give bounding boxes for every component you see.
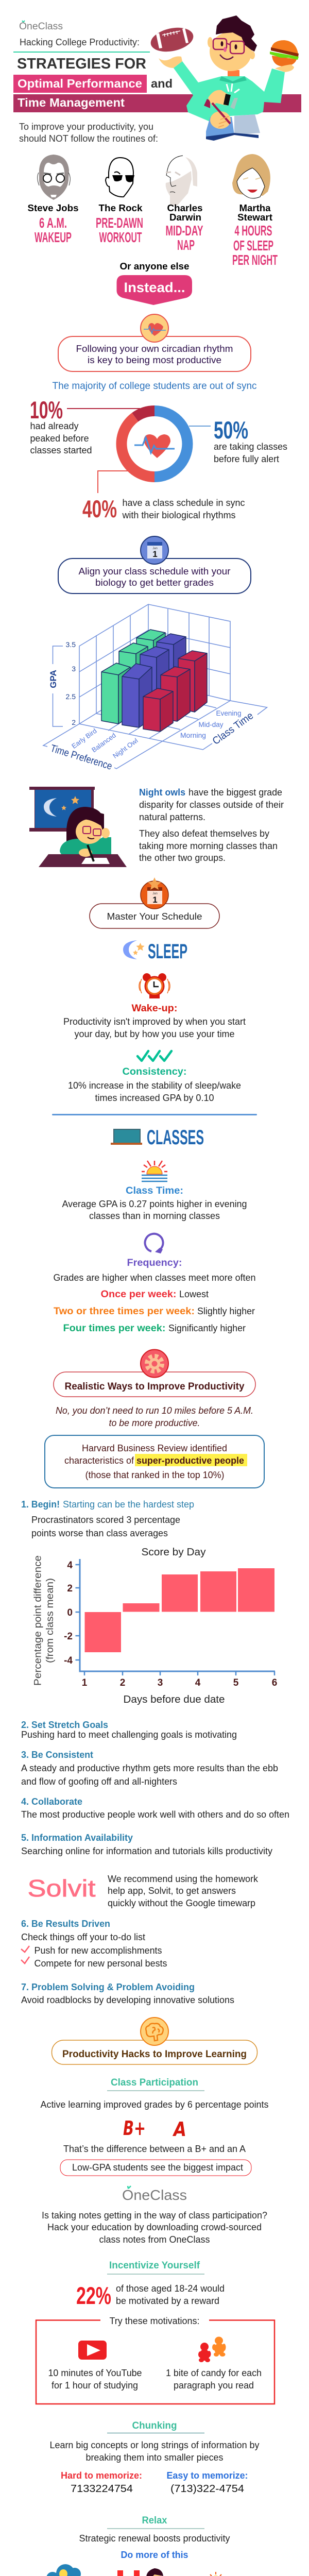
list item 1: begin: 1. Begin!: [21, 1499, 60, 1510]
list item 4: [21, 1797, 289, 1820]
text: frequency: Grades are higher when classes meet more often: [54, 1273, 255, 1283]
routine: Martha: PER NIGHT: [232, 252, 278, 268]
example: easy to memorize: Easy to memorize:: [167, 2470, 248, 2481]
text: night owls: [139, 787, 284, 863]
y axis label: (from class mean): [45, 1578, 56, 1663]
handwritten grades: B+: [123, 2117, 146, 2140]
stat: 10 percent: [30, 396, 92, 455]
icon: three check marks: [138, 1051, 171, 1061]
text: youtube reward: 10 minutes of YouTube: [48, 2368, 142, 2378]
list item 1: begin: Procrastinators scored 3 percentage: [31, 1515, 180, 1525]
title banner: time management: [13, 94, 301, 112]
handwritten grades: [123, 2117, 186, 2141]
list item 6: Compete for new personal bests: [34, 1958, 167, 1969]
segment: 50 percent: [154, 405, 193, 482]
panel: people routines: [28, 154, 278, 268]
logo: Solvit: Solvit: [28, 1875, 96, 1902]
icon: calendar with star: [141, 877, 168, 909]
title banner: time management: Time Management: [18, 96, 125, 109]
stat: 22 percent: of those aged 18-24 would: [116, 2283, 225, 2294]
y axis label: [33, 1555, 56, 1686]
name: Charles Darwin: Darwin: [169, 212, 201, 223]
icon: heart pulse: [141, 314, 168, 342]
example: hard to memorize: Hard to memorize:: [61, 2470, 142, 2481]
text: candy reward: 1 bite of candy for each: [166, 2368, 262, 2378]
stat: 10 percent: had already: [30, 421, 78, 431]
axis: time preference: Balanced: [90, 731, 117, 754]
text: class time: Average GPA is 0.27 points higher in evening: [62, 1199, 247, 1209]
list item 3: 3. Be Consistent: [21, 1750, 93, 1760]
icon: gear: [141, 1350, 168, 1378]
routine: Jobs: WAKEUP: [35, 229, 72, 245]
icon: chalkboard: [111, 1129, 142, 1145]
text: night owls: taking more morning classes than: [139, 841, 278, 851]
routine: Jobs: [35, 215, 72, 245]
list item 5: [21, 1833, 272, 1856]
list item 3: A steady and productive rhythm gets more results than the ebb: [21, 1763, 278, 1773]
leader lines: [67, 409, 211, 493]
portrait: Martha Stewart: [232, 154, 270, 198]
list item 2: [21, 1720, 237, 1740]
icon: football: [148, 24, 196, 55]
list item 2: 2. Set Stretch Goals: [21, 1720, 108, 1730]
text: candy reward: paragraph you read: [174, 2380, 254, 2391]
callout: instead: [116, 275, 192, 305]
text: frequency: Significantly higher: [168, 1323, 246, 1333]
x axis label: Days before due date: [124, 1694, 225, 1705]
stat: 50 percent: 50%: [214, 416, 248, 444]
axis: class time: Morning: [180, 731, 206, 739]
section: incentivize yourself: Incentivize Yourself: [109, 2260, 200, 2271]
stat: 10 percent: peaked before: [30, 433, 89, 444]
portrait: Charles Darwin: [166, 156, 197, 206]
title line 1: STRATEGIES FOR: [17, 56, 146, 72]
y axis label: Percentage point difference: [33, 1555, 43, 1686]
text: Master Your Schedule: [107, 911, 202, 922]
name: Martha Stewart: Martha: [239, 203, 271, 213]
x tick labels: [82, 1677, 277, 1688]
bars: front row: [101, 663, 173, 732]
text: Solvit recommendation: help app, Solvit, to get answers: [108, 1886, 236, 1896]
example: easy to memorize: [167, 2470, 248, 2495]
x tick labels: 6: [272, 1677, 277, 1688]
name: Charles Darwin: Charles: [167, 203, 203, 213]
text: candy reward: [166, 2368, 262, 2391]
logo: OneClass: OneClass: [122, 2187, 187, 2203]
y tick labels: -2: [64, 1631, 73, 1642]
callout: instead: Instead...: [124, 280, 185, 295]
text: consistency: times increased GPA by 0.10: [95, 1093, 214, 1103]
list item 6: Push for new accomplishments: [34, 1945, 162, 1956]
axis: time preference: Night Owl: [111, 737, 140, 760]
x tick labels: 1: [82, 1677, 88, 1688]
routine: Darwin: MID-DAY: [166, 223, 203, 239]
y tick labels: 4: [67, 1560, 73, 1571]
section: class participation: [40, 2077, 269, 2110]
panel: master your schedule heading: [90, 877, 219, 928]
accent rule: [13, 52, 150, 53]
text: class time: [62, 1185, 247, 1221]
bars: middle row: [119, 643, 190, 721]
panel: realistic ways heading: [54, 1350, 255, 1397]
subtitle: Hacking College Productivity:: [20, 37, 140, 47]
list item 6: [21, 1919, 167, 1969]
icon: calendar with star: Jan: [152, 892, 158, 895]
section: class participation: Class Participation: [111, 2077, 198, 2088]
list item 5: Searching online for information and tutorials kills productivity: [21, 1846, 272, 1856]
example: easy to memorize: (713)322-4754: [170, 2483, 244, 2495]
routine: Martha: 4 HOURS: [235, 223, 272, 239]
text: frequency: Once per week:: [101, 1289, 176, 1300]
list item 3: [21, 1750, 278, 1787]
section heading: sleep: SLEEP: [148, 940, 187, 963]
icon: alarm clock: [139, 973, 170, 998]
highlight: super-productive people: [136, 1455, 244, 1466]
segment: 40 percent: [116, 413, 154, 482]
portrait: The Rock: [106, 158, 134, 197]
3D bar chart: GPA by class time and time preference: [43, 604, 267, 772]
name: The Rock: The Rock: [99, 203, 143, 213]
list item 7: 7. Problem Solving & Problem Avoiding: [21, 1982, 195, 1992]
logo: OneClass: OneClass: [19, 21, 63, 32]
text: notes promo: Is taking notes getting in the way of class participation?: [42, 2210, 267, 2221]
text: frequency: Lowest: [179, 1289, 209, 1299]
list item 6: 6. Be Results Driven: [21, 1919, 110, 1929]
routine: Martha: OF SLEEP: [233, 238, 273, 253]
section heading: classes: [111, 1126, 204, 1149]
text: or anyone else: Or anyone else: [119, 261, 190, 272]
panel: harvard business review: [45, 1435, 264, 1488]
illustration: daydreaming: [46, 2564, 101, 2576]
heading: out of sync: The majority of college students are out of sync: [53, 381, 256, 392]
illustration: night owl at desk: [29, 787, 127, 867]
text: night owls: disparity for classes outside of their: [139, 800, 284, 810]
stat: 22 percent: 22%: [76, 2282, 111, 2309]
text: consistency: 10% increase in the stability of sleep/wake: [68, 1080, 241, 1091]
text: difference: That’s the difference between a B+ and an A: [63, 2144, 246, 2154]
text: consistency: Consistency:: [123, 1066, 186, 1077]
illustration: sunbathing: [194, 2572, 259, 2576]
icon: calendar with star: 1: [152, 895, 158, 905]
section: chunking: Chunking: [132, 2420, 177, 2431]
panel: try these motivations: Try these motivations:: [109, 2316, 200, 2326]
axis: GPA: GPA: [48, 670, 58, 688]
section: relax: Do more of this: [121, 2550, 188, 2560]
icon: calendar: [141, 536, 168, 564]
text: night owls: Night owls: [139, 787, 185, 798]
axis: GPA: 2.5: [66, 692, 76, 701]
text: frequency: Slightly higher: [197, 1306, 255, 1316]
list item 1: begin: points worse than class averages: [31, 1528, 168, 1538]
section: relax: Relax: [142, 2515, 167, 2526]
routine: Martha: [232, 223, 278, 268]
intro text: should NOT follow the routines of:: [19, 133, 158, 144]
section: chunking: [49, 2420, 260, 2495]
text: notes promo: Hack your education by downloading crowd-sourced: [47, 2222, 262, 2232]
panel: try these motivations: [36, 2316, 274, 2404]
grid: [43, 604, 267, 769]
text: biology to get better grades: [95, 578, 214, 588]
portrait: Steve Jobs: [38, 155, 70, 200]
text: notes promo: class notes from OneClass: [99, 2234, 210, 2245]
axis: class time: [180, 709, 255, 747]
text: youtube reward: [48, 2368, 142, 2391]
section heading: sleep: [123, 940, 187, 963]
section: chunking: Learn big concepts or long strings of information by: [49, 2440, 260, 2450]
list item 1: begin: Starting can be the hardest step: [63, 1499, 194, 1510]
panel: harvard business review: (those that ranked in the top 10%): [85, 1470, 225, 1480]
icon: moon and stars: [123, 940, 145, 959]
icon: burger: [270, 40, 299, 66]
text: frequency: [54, 1258, 255, 1334]
text: Solvit recommendation: quickly without the Google timewarp: [108, 1898, 255, 1908]
icon: notebook: [206, 114, 260, 141]
stat: 10 percent: 10%: [30, 396, 63, 423]
x tick labels: 4: [195, 1677, 201, 1688]
handwritten grades: A: [172, 2118, 186, 2141]
list item 5: 5. Information Availability: [21, 1833, 133, 1843]
text: [78, 566, 231, 588]
y tick labels: -4: [64, 1655, 73, 1666]
text: italic note: No, you don’t need to run 10 miles before 5 A.M.: [56, 1405, 253, 1416]
text: [76, 344, 233, 365]
section: relax: [79, 2515, 230, 2560]
stat: 22 percent: [76, 2282, 225, 2309]
text: is key to being most productive: [88, 355, 221, 365]
text: Align your class schedule with your: [78, 566, 231, 577]
text: Following your own circadian rhythm: [76, 344, 233, 354]
axis: GPA: [48, 640, 76, 726]
text: italic note: [56, 1405, 253, 1428]
illustration: exercising: [115, 2568, 177, 2576]
name: Charles Darwin: [167, 203, 203, 223]
icon: sunrise: [142, 1161, 167, 1181]
routine: Darwin: NAP: [177, 237, 195, 253]
routine: Rock: WORKOUT: [99, 229, 142, 245]
list item 3: and flow of goofing off and all-nighters: [21, 1776, 177, 1787]
name: Martha Stewart: Stewart: [237, 212, 272, 223]
text: night owls: They also defeat themselves by: [139, 828, 269, 839]
stat: 22 percent: be motivated by a reward: [116, 2296, 219, 2306]
text: night owls: natural patterns.: [139, 812, 205, 822]
stat: 50 percent: [214, 416, 287, 464]
list item 4: The most productive people work well with others and do so often: [21, 1809, 289, 1820]
donut chart: class schedule sync: [67, 405, 211, 493]
chart title: Score by Day: [141, 1547, 206, 1558]
text: notes promo: [42, 2210, 267, 2245]
icon: cycle arrow: [145, 1234, 163, 1253]
text: frequency: Four times per week:: [63, 1323, 166, 1334]
bars: back row: [136, 630, 207, 712]
stat: 50 percent: are taking classes: [214, 442, 287, 452]
intro text: [19, 122, 158, 144]
stat: 40 percent: with their biological rhythms: [122, 510, 236, 520]
text: Realistic Ways to Improve Productivity: [65, 1381, 245, 1392]
illustration: multitasking student: [148, 15, 299, 141]
bar chart: score by day: [33, 1547, 277, 1705]
axis: time preference: [49, 727, 140, 772]
name: Steve Jobs: Steve Jobs: [28, 203, 78, 213]
section: relax: Strategic renewal boosts productivity: [79, 2533, 230, 2544]
text: frequency: Frequency:: [127, 1258, 182, 1268]
text: wake-up: Wake-up:: [132, 1003, 177, 1014]
panel: harvard business review: characteristics of: [64, 1455, 134, 1466]
list item 1: begin: [21, 1499, 194, 1538]
text: wake-up: your day, but by how you use your time: [74, 1029, 235, 1039]
section: class participation: Active learning improved grades by 6 percentage points: [40, 2099, 269, 2110]
text: class time: Class Time:: [126, 1185, 183, 1196]
text: class time: classes than in morning classes: [89, 1211, 220, 1221]
axis: time preference: Early Bird: [70, 727, 98, 750]
panel: circadian rhythm heading: [58, 314, 251, 371]
icon: calendar: 1: [152, 549, 158, 559]
list item 7: Avoid roadblocks by developing innovative solutions: [21, 1995, 234, 2005]
text: frequency: Two or three times per week:: [54, 1306, 195, 1317]
list item 4: 4. Collaborate: [21, 1797, 82, 1807]
text: italic note: to be more productive.: [109, 1418, 200, 1428]
routine: Rock: [96, 215, 143, 245]
example: hard to memorize: 7133224754: [71, 2483, 133, 2495]
segment: 10 percent: [132, 405, 154, 421]
stat: 10 percent: classes started: [30, 445, 92, 455]
routine: Rock: PRE-DAWN: [96, 215, 143, 231]
text: wake-up: [63, 1003, 246, 1039]
x tick labels: 5: [233, 1677, 239, 1688]
title banner: optimal performance: [13, 75, 147, 93]
panel: productivity hacks heading: [52, 2018, 258, 2064]
text: Solvit recommendation: We recommend using the homework: [108, 1874, 259, 1884]
icon: check marks: [21, 1946, 29, 1963]
text: Productivity Hacks to Improve Learning: [62, 2049, 247, 2060]
axis: GPA: 3: [72, 665, 76, 673]
intro text: To improve your productivity, you: [19, 122, 153, 132]
panel: align schedule heading: [58, 536, 251, 594]
icon: calendar: Jan: [152, 547, 158, 550]
text: night owls: have the biggest grade: [188, 787, 282, 798]
section heading: classes: CLASSES: [147, 1126, 204, 1149]
routine: Darwin: [166, 223, 203, 253]
example: hard to memorize: [61, 2470, 142, 2495]
stat: 50 percent: before fully alert: [214, 454, 279, 464]
title banner: optimal performance: Optimal Performance: [18, 77, 142, 90]
panel: harvard business review: Harvard Business Review identified: [82, 1443, 227, 1453]
text: Solvit recommendation: [108, 1874, 259, 1908]
text: consistency: [68, 1066, 241, 1103]
routine: Jobs: 6 A.M.: [39, 215, 67, 231]
title word: and: and: [151, 77, 173, 90]
icon: video play: [78, 2341, 107, 2360]
list item 7: [21, 1982, 234, 2005]
axis: GPA: 2: [72, 718, 76, 726]
y tick labels: [64, 1560, 73, 1666]
axis: class time: Evening: [216, 709, 241, 717]
list item 6: Check things off your to-do list: [21, 1932, 145, 1942]
section: chunking: breaking them into smaller pieces: [85, 2452, 224, 2463]
icon: brain: [141, 2018, 168, 2045]
axes: [75, 1559, 275, 1675]
text: youtube reward: for 1 hour of studying: [52, 2380, 138, 2391]
x tick labels: 2: [120, 1677, 125, 1688]
header: [13, 15, 301, 144]
icon: gummy bears: [198, 2337, 226, 2362]
stat: 40 percent: 40%: [82, 495, 117, 522]
name: Martha Stewart: [237, 203, 272, 223]
y tick labels: 0: [67, 1607, 73, 1618]
callout: low-GPA students: [60, 2160, 251, 2176]
list item 2: Pushing hard to meet challenging goals is motivating: [21, 1730, 237, 1740]
axis: class time: Class Time: [211, 710, 255, 747]
icon: heart: [134, 434, 175, 458]
text: wake-up: Productivity isn't improved by when you start: [63, 1016, 246, 1027]
axis: GPA: 3.5: [66, 640, 76, 649]
stat: 40 percent: have a class schedule in sync: [123, 498, 245, 508]
y tick labels: 2: [67, 1583, 73, 1594]
axis: class time: Mid-day: [199, 720, 224, 728]
axis: time preference: Time Preference: [49, 743, 113, 772]
x tick labels: 3: [158, 1677, 163, 1688]
stat: 40 percent: [82, 495, 245, 522]
text: night owls: the other two groups.: [139, 853, 226, 863]
bars: [84, 1568, 274, 1652]
callout: low-GPA students: Low-GPA students see the biggest impact: [72, 2162, 243, 2173]
